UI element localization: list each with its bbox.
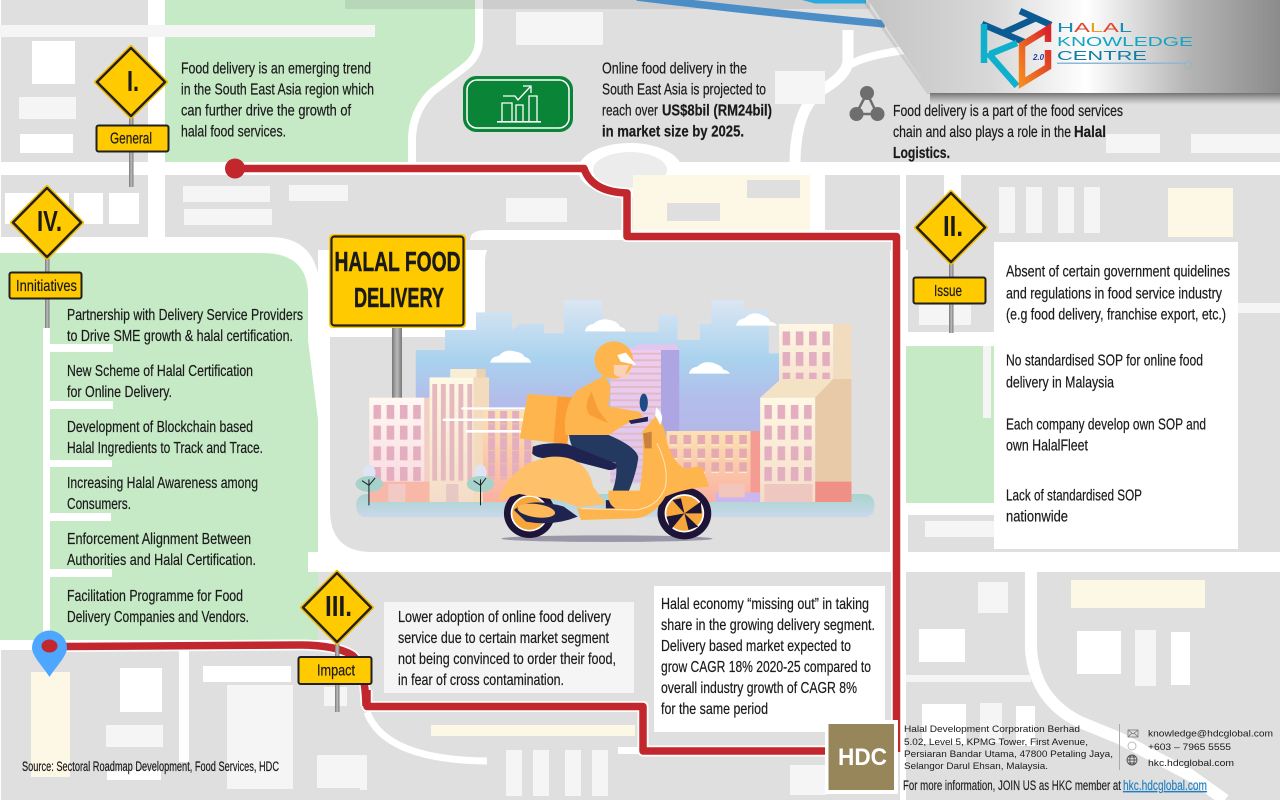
panel: issues: and regulations in food service industry [1006,286,1222,302]
sign IV: Initiatives: Innitiatives [16,278,77,295]
icon: growth chart [464,78,572,130]
text block: market size: in market size by 2025. [602,124,744,140]
text block: general trend: halal food services. [181,124,286,140]
text block: food services chain: chain and also plays a role in the [893,124,1071,141]
panel: missing out on delivery growth: Delivery based market expected to [661,638,851,655]
text block: initiatives list: Increasing Halal Awareness among [67,475,258,492]
sign IV: Initiatives [10,187,82,328]
panel: issues: Each company develop own SOP and [1006,416,1206,434]
text block: initiatives list: Authorities and Halal Certification. [67,552,256,569]
text block: initiatives list: to Drive SME growth & halal certification. [67,328,293,345]
panel: missing out on delivery growth: for the same period [661,701,768,718]
panel: lower adoption: in fear of cross contamination. [398,672,564,689]
icon: globe [1127,755,1137,765]
delivery route line [65,158,896,752]
ground strip [356,494,875,517]
ground shadow [501,535,713,542]
sign III: Impact: Impact [317,662,355,680]
text block: market size: Online food delivery in the [602,60,747,78]
source note: Source: Sectoral Roadmap Development, Food Services, HDC [22,759,279,774]
title sign: Halal Food Delivery [329,234,466,398]
speed lines [443,407,539,433]
text block: initiatives list: Delivery Companies and Vendors. [67,609,249,626]
text block: general trend [181,60,374,140]
text block: market size: US$8bil (RM24bil) [662,102,772,120]
delivery box [520,394,572,445]
sign III: Impact: III. [325,591,352,623]
logo: HDC [825,720,898,794]
sign III: Impact [298,572,372,712]
text block: food services chain: Halal [1074,124,1106,141]
text block: market size [602,60,772,140]
logo: Halal Knowledge Centre: CENTRE [1057,48,1148,63]
footer: membership call to action: For more information, JOIN US as HKC member at [903,778,1121,793]
panel: lower adoption [384,602,634,693]
city skyline [416,300,779,433]
text block: initiatives list: Consumers. [67,496,131,513]
footer: contact details: +603 – 7965 5555 [1148,742,1231,753]
panel: issues: nationwide [1006,508,1068,526]
sign I: General [96,47,168,187]
sign II: Issue: Issue [934,283,962,300]
sign II: Issue [914,192,986,333]
header banner: silver [864,0,1280,105]
panel: missing out on delivery growth: Halal economy “missing out” in taking [661,596,869,613]
panel: lower adoption: not being convinced to order their food, [398,651,616,668]
logo: Halal Knowledge Centre: KNOWLEDGE [1057,34,1194,49]
panel: issues: delivery in Malaysia [1006,374,1114,392]
panel: issues: Lack of standardised SOP [1006,488,1142,504]
illustration: rider on scooter in city [355,300,875,542]
footer: address: Selangor Darul Ehsan, Malaysia. [904,761,1048,772]
logo: Halal Knowledge Centre: 2.0 [1032,53,1045,62]
text block: initiatives list: Partnership with Delivery Service Providers [67,307,303,324]
text block: general trend: can further drive the growth of [181,102,351,120]
icon: network nodes [850,86,884,120]
wheels [504,487,711,539]
title sign: Halal Food Delivery: HALAL FOOD [334,246,460,277]
text block: initiatives list [67,307,303,626]
panel: issues [994,242,1238,549]
text block: food services chain [893,103,1123,162]
footer: contact details [1119,724,1273,770]
logo: Halal Knowledge Centre: H A L A L [1057,21,1132,35]
buildings [32,41,75,84]
text block: general trend: Food delivery is an emerging trend [181,60,371,78]
sign I: General: General [110,130,152,148]
text block: initiatives list: New Scheme of Halal Certification [67,363,253,380]
park: top green area [165,0,479,162]
scooter body [498,394,709,520]
rider [565,341,643,511]
icon: location pin [32,630,67,677]
text block: initiatives list: Development of Blockchain based [67,419,253,436]
sign I: General: I. [127,66,139,98]
footer: address: Halal Development Corporation Berhad [904,724,1080,735]
text block: market size: South East Asia is projected to [602,82,766,98]
footer: membership call to action: hkc.hdcglobal.com [1123,778,1207,793]
text block: food services chain: Logistics. [893,145,950,162]
footer: address [904,724,1113,772]
panel: issues: No standardised SOP for online food [1006,352,1203,370]
footer: contact details: knowledge@hdcglobal.com [1148,728,1273,740]
panel: issues: own HalalFleet [1006,438,1088,454]
text block: initiatives list: Facilitation Programme for Food [67,588,243,605]
logo: Halal Knowledge Centre [982,11,1194,86]
footer: address: 5.02, Level 5, KPMG Tower, First Avenue, [904,737,1088,748]
panel: missing out on delivery growth [654,586,885,732]
text block: initiatives list: Enforcement Alignment Between [67,531,251,548]
panel: missing out on delivery growth: overall industry growth of CAGR 8% [661,680,857,697]
text block: market size: reach over [602,102,658,120]
icon: envelope [1128,730,1138,737]
footer: contact details: hkc.hdcglobal.com [1148,758,1234,769]
panel: lower adoption: service due to certain market segment [398,630,609,647]
text block: food services chain: Food delivery is a part of the food services [893,103,1123,120]
footer: address: Persiaran Bandar Utama, 47800 Petaling Jaya, [904,749,1113,760]
text block: initiatives list: Halal Ingredients to Track and Trace. [67,440,263,457]
panel: missing out on delivery growth: grow CAGR 18% 2020-25 compared to [661,659,871,676]
sign II: Issue: II. [943,211,963,243]
text block: initiatives list: for Online Delivery. [67,384,172,401]
roundabout [578,143,682,197]
sign IV: Initiatives: IV. [37,206,62,238]
panel: missing out on delivery growth: share in the growing delivery segment. [661,617,875,634]
buildings row [369,324,851,502]
park: left green area [0,253,318,642]
logo: HDC: HDC [838,744,887,771]
panel: lower adoption: Lower adoption of online food delivery [398,609,611,626]
trees [355,465,494,505]
text block: general trend: in the South East Asia region which [181,82,374,98]
title sign: Halal Food Delivery: DELIVERY [354,282,444,313]
